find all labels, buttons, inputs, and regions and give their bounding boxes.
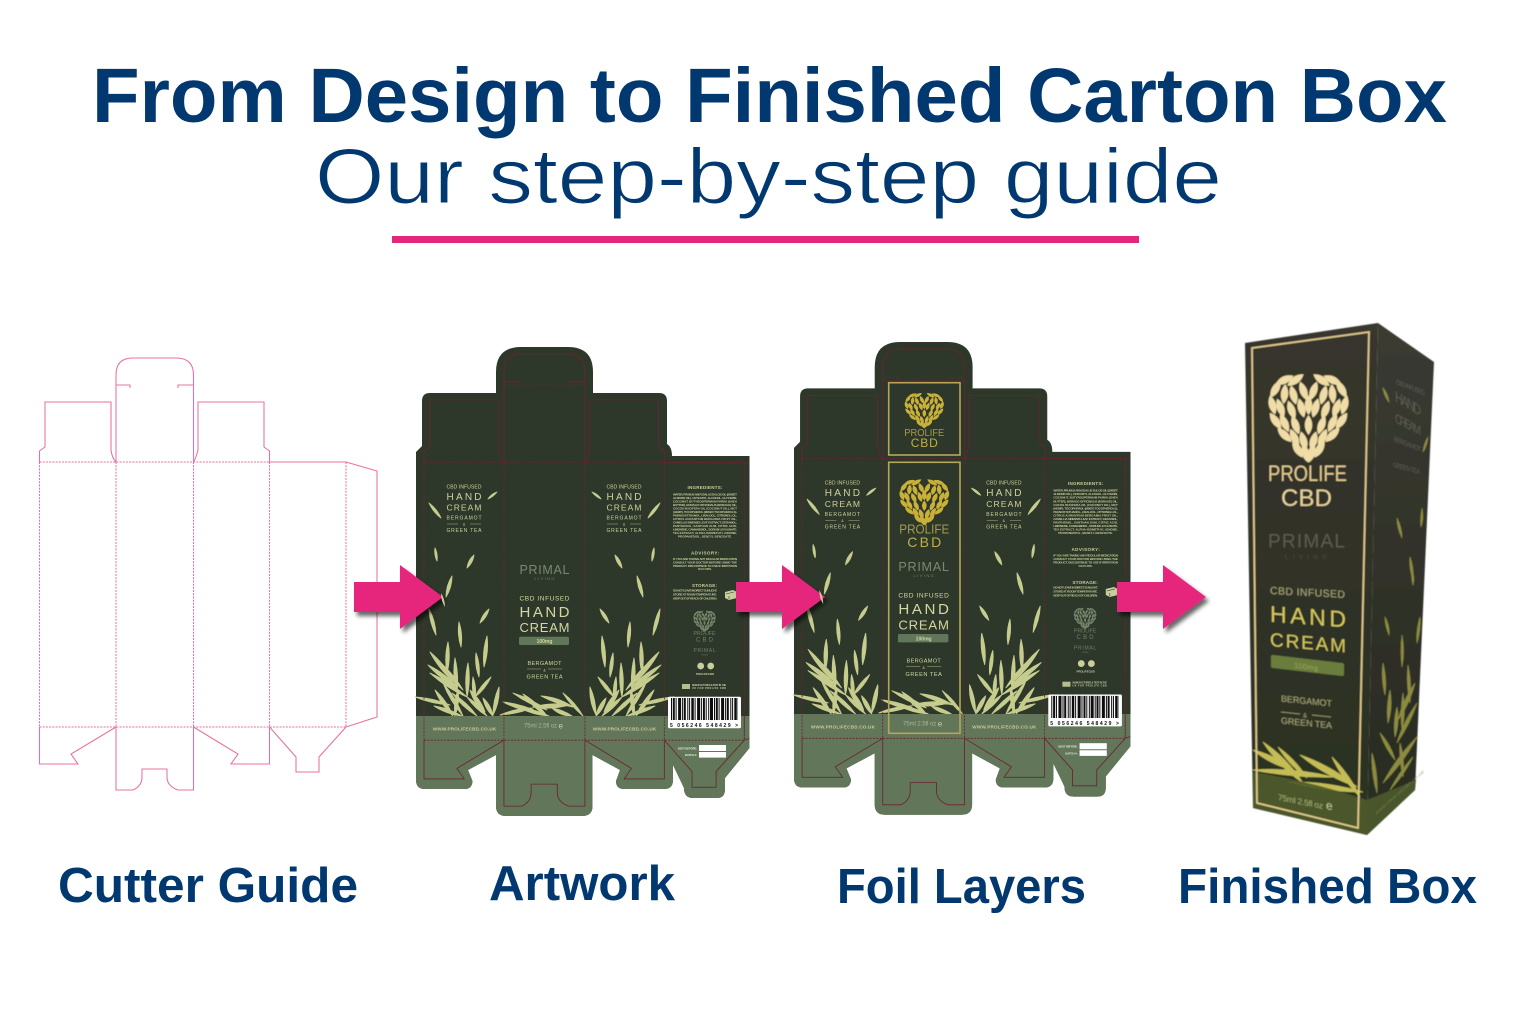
- right panel text: GREEN TEA: [986, 524, 1022, 530]
- back panel text: LIMONENE, CANNABIDIOL, SODIUM LEVULINATE,: [673, 528, 737, 532]
- back panel text: PRIMAL: [1074, 645, 1096, 651]
- arrow 3: [1117, 565, 1206, 629]
- centre panel text: 75ml 2.5fl oz: [903, 722, 936, 728]
- website text: WWW.PROLIFECBD.CO.UK: [972, 725, 1037, 730]
- back panel text: CITRUS AURANTIUM BERGAMIA FRUIT OIL,: [673, 517, 737, 521]
- box product text: CREAM: [1270, 630, 1346, 657]
- back panel text: BEST BEFORE:: [1058, 745, 1078, 749]
- foil logo: top flap: [904, 392, 945, 450]
- label: cutter guide: Cutter Guide: [58, 859, 358, 913]
- back panel text: CITRUS AURANTIUM BERGAMIA FRUIT OIL,: [1053, 513, 1118, 517]
- back panel text: STORE AT ROOM TEMPERATURE.: [1053, 589, 1098, 593]
- box product text: CBD INFUSED: [1270, 585, 1345, 601]
- right panel text: [986, 481, 1022, 530]
- back panel text: TEA EXTRACT, ALPHA-ISOMETHYL IONONE,: [1053, 528, 1118, 532]
- centre panel text: PRIMAL: [898, 560, 949, 574]
- left panel text: BERGAMOT: [446, 516, 482, 522]
- back panel text: KEEP OUT OF REACH OF CHILDREN.: [673, 596, 717, 600]
- box brand text: [1268, 461, 1347, 561]
- back panel text: CBD: [1077, 635, 1094, 641]
- left panel text: [446, 484, 482, 534]
- centre panel text: &: [922, 666, 925, 670]
- box side text: GREEN TEA: [1393, 461, 1421, 477]
- centre panel text: CBD INFUSED: [898, 593, 949, 600]
- back panel text: (HEMP), TOCOPHEROL (MIXED TOCOPHEROLS),: [1053, 506, 1118, 510]
- back panel text: ADVISORY:: [691, 550, 720, 556]
- label: foil layers: Foil Layers: [837, 860, 1086, 914]
- box product text: HAND: [1270, 601, 1346, 632]
- box brand text: LIVING: [1285, 554, 1327, 561]
- back panel text: CONSULT YOUR DOCTOR BEFORE USING THE: [1053, 557, 1118, 561]
- back panel text: PRODUCT. DISCONTINUE TO USE IF IRRITATION: [1053, 561, 1118, 565]
- back panel text: COCOS NUCIFERA OIL (COCONUT OIL), MCT: [673, 506, 737, 510]
- back panel text: PRIMAL: [694, 648, 716, 654]
- back panel text: PROPANEDIOL, BENZYL BENZOATE.: [678, 534, 732, 538]
- back panel text: MANUFACTURED & TEST IN THE: [1072, 682, 1107, 685]
- centre panel text: CREAM: [520, 620, 570, 635]
- website text: [433, 726, 657, 732]
- box brand text: PROLIFE: [1268, 461, 1347, 486]
- box heart logo: [1266, 371, 1351, 464]
- back panel text: STORE AT ROOM TEMPERATURE.: [673, 592, 717, 596]
- back panel text: CAMELLIA SINENSIS LEAF EXTRACT, GERANIOL,: [673, 520, 737, 524]
- back panel logo: [1073, 607, 1097, 629]
- centre panel text: LIVING: [914, 573, 934, 578]
- left panel text: HAND: [446, 492, 482, 503]
- right panel text: &: [623, 522, 626, 526]
- right panel text: BERGAMOT: [606, 516, 642, 522]
- back panel text: [670, 485, 738, 757]
- back panel text: TEA EXTRACT, ALPHA-ISOMETHYL IONONE,: [673, 531, 737, 535]
- right panel text: CBD INFUSED: [606, 484, 642, 490]
- back panel text: STORAGE:: [692, 583, 718, 588]
- back panel text: INGREDIENTS:: [688, 485, 723, 490]
- back panel text: WATER, PRUNUS AMYGDALUS DULCIS OIL (SWEET: [1053, 489, 1118, 493]
- back panel text: WATER, PRUNUS AMYGDALUS DULCIS OIL (SWEET: [673, 492, 737, 496]
- left panel text: &: [463, 522, 466, 526]
- website text: [811, 725, 1037, 730]
- right panel text: &: [1003, 519, 1006, 523]
- back panel text: PHENOXYETHANOL, LINALOOL, CITRONELLOL,: [1053, 510, 1118, 514]
- back panel text: LIVING: [701, 654, 708, 656]
- box product text: &: [1303, 714, 1307, 720]
- leaves on front face: [1253, 742, 1363, 797]
- arrow 1: [354, 565, 443, 629]
- back panel text: BEST BEFORE:: [678, 746, 697, 750]
- right panel text: BERGAMOT: [986, 512, 1022, 518]
- left panel text: &: [841, 519, 844, 523]
- panel: foil layers carton: [793, 342, 1158, 815]
- panel: finished box photo: [1245, 323, 1434, 835]
- website text: WWW.PROLIFECBD.CO.UK: [811, 725, 876, 730]
- box faces: [1245, 323, 1434, 835]
- right panel text: HAND: [986, 488, 1022, 499]
- website text: WWW.PROLIFECBD.CO.UK: [433, 726, 497, 732]
- back panel text: CAMELLIA SINENSIS LEAF EXTRACT, GERANIOL,: [1053, 517, 1118, 521]
- gold frame: [1252, 332, 1369, 828]
- left panel text: GREEN TEA: [446, 528, 482, 534]
- centre panel text: &: [543, 668, 546, 672]
- box side text: [1376, 378, 1425, 816]
- left panel text: CBD INFUSED: [825, 481, 860, 487]
- centre panel text: 100mg: [537, 639, 552, 645]
- back panel text: OCCURS.: [1079, 564, 1093, 568]
- foil frame: top flap: [889, 383, 960, 455]
- title line 2: Our step-by-step guide: [315, 132, 1222, 220]
- green band: [1253, 772, 1416, 835]
- box product text: [1270, 585, 1346, 813]
- centre panel text: HAND: [520, 604, 570, 621]
- centre panel text: BERGAMOT: [907, 659, 941, 665]
- label: artwork: Artwork: [489, 857, 676, 911]
- back panel text: PRODUCT. DISCONTINUE TO USE IF IRRITATION: [673, 564, 737, 568]
- left panel text: CREAM: [446, 502, 482, 512]
- back panel text: INGREDIENTS:: [1068, 481, 1104, 486]
- panel: artwork carton: [415, 347, 777, 816]
- back panel text: BATCH #:: [1065, 751, 1078, 755]
- back panel text: BUTTER), BORAGO OFFICINALIS (BORAGE) OIL,: [673, 503, 737, 507]
- back panel text: BATCH #:: [685, 753, 697, 757]
- label: finished box: Finished Box: [1178, 860, 1477, 914]
- centre panel text: PRIMAL: [520, 563, 570, 577]
- centre panel text: [898, 560, 949, 729]
- right panel text: CREAM: [986, 499, 1022, 509]
- box product text: GREEN TEA: [1281, 716, 1332, 731]
- foil logo: main panel: CBD: [907, 534, 941, 550]
- box product text: 75ml 2.5fl oz: [1278, 792, 1323, 811]
- title: [92, 53, 1447, 220]
- box side text: BERGAMOT: [1394, 435, 1421, 454]
- centre panel text: 75ml 2.5fl oz: [524, 724, 557, 730]
- centre panel text: LIVING: [534, 576, 554, 581]
- right panel text: [606, 484, 642, 534]
- right panel text: HAND: [606, 492, 642, 503]
- website text: WWW.PROLIFECBD.CO.UK: [593, 726, 657, 732]
- box side text: WWW.PROLIFECBD.CO.UK: [1376, 769, 1424, 816]
- right panel text: CBD INFUSED: [986, 481, 1022, 487]
- centre panel text: CBD INFUSED: [520, 596, 570, 602]
- box side text: CREAM: [1395, 410, 1421, 439]
- back panel text: STORAGE:: [1072, 580, 1098, 585]
- centre panel text: e: [558, 722, 564, 730]
- centre panel text: e: [938, 720, 943, 729]
- back panel text: PANTHENOL, XANTHAN GUM, CITRIC ACID,: [673, 524, 737, 528]
- back panel text: PROLIFECBD: [1076, 670, 1095, 674]
- back panel text: COCONUT, BUTYROSPERMUM PARKII (SHEA: [1053, 496, 1119, 500]
- left panel text: BERGAMOT: [825, 512, 860, 518]
- back panel text: COCONUT, BUTYROSPERMUM PARKII (SHEA: [673, 500, 738, 504]
- back panel text: (HEMP), TOCOPHEROL (MIXED TOCOPHEROLS),: [673, 510, 737, 514]
- back panel text: [1050, 481, 1119, 755]
- box product text: e: [1326, 798, 1333, 813]
- back panel text: PROLIFE: [1074, 628, 1096, 634]
- back panel text: PANTHENOL, XANTHAN GUM, CITRIC ACID,: [1053, 520, 1118, 524]
- leaf over arrow 2: [819, 590, 823, 604]
- centre panel text: CREAM: [898, 617, 949, 632]
- back panel text: UK FOR PROLIFE CBD: [1072, 685, 1107, 688]
- centre panel text: BERGAMOT: [528, 661, 562, 667]
- back panel text: LIMONENE, CANNABIDIOL, SODIUM LEVULINATE,: [1053, 524, 1118, 528]
- back panel text: PROLIFE: [694, 631, 716, 637]
- centre panel text: GREEN TEA: [905, 672, 942, 678]
- back panel text: PROLIFECBD: [696, 672, 714, 676]
- left panel text: CBD INFUSED: [446, 484, 482, 490]
- back panel text: OCCURS.: [698, 567, 712, 571]
- box product text: BERGAMOT: [1281, 694, 1332, 709]
- back panel text: PHENOXYETHANOL, LINALOOL, CITRONELLOL,: [673, 514, 737, 518]
- panel: cutter guide dieline: [40, 358, 377, 790]
- arrow 2: [736, 565, 825, 629]
- back panel text: PROPANEDIOL, BENZYL BENZOATE.: [1058, 531, 1113, 535]
- back panel text: IF YOU ARE TAKING ANY REGULAR MEDICATION: [1053, 554, 1118, 558]
- right panel text: CREAM: [606, 502, 642, 512]
- back panel text: COCOS NUCIFERA OIL (COCONUT OIL), MCT: [1053, 503, 1118, 507]
- box product text: 100mg: [1294, 661, 1318, 672]
- leaves on right face: [1372, 388, 1428, 793]
- centre panel text: [520, 563, 570, 730]
- back panel logo: [693, 610, 716, 632]
- left panel text: CREAM: [825, 499, 860, 509]
- foil logo: top flap: CBD: [911, 436, 938, 450]
- back panel text: UK FOR PROLIFE CBD: [692, 687, 726, 690]
- back panel text: 5 056246 548429 >: [1050, 721, 1119, 727]
- back panel text: 5 056246 548429 >: [670, 723, 738, 729]
- pink underline: [392, 236, 1139, 243]
- centre panel text: HAND: [898, 601, 949, 618]
- foil logo: main panel: [898, 478, 950, 550]
- box brand text: PRIMAL: [1268, 532, 1345, 552]
- back panel text: CBD: [696, 638, 714, 644]
- centre panel text: 100mg: [916, 636, 932, 642]
- back panel text: ADVISORY:: [1071, 547, 1100, 552]
- title line 1: From Design to Finished Carton Box: [92, 53, 1447, 139]
- foil logo: main panel: PROLIFE: [899, 522, 949, 536]
- box brand text: CBD: [1281, 485, 1332, 512]
- back panel text: IF YOU ARE TAKING ANY REGULAR MEDICATION: [673, 557, 737, 561]
- back panel text: KEEP OUT OF REACH OF CHILDREN.: [1053, 594, 1098, 598]
- left panel text: GREEN TEA: [825, 524, 861, 530]
- back panel text: DO NOT LEAVE IN DIRECT SUNLIGHT,: [1053, 585, 1098, 589]
- back panel text: ALMOND OIL), CETEARYL ALCOHOL, GLYCERIN,: [1053, 492, 1118, 496]
- back panel text: MANUFACTURED & TEST IN THE: [692, 684, 726, 687]
- leaf over arrow 1: [441, 593, 445, 607]
- left panel text: HAND: [825, 488, 860, 499]
- back panel text: LIVING: [1082, 652, 1089, 654]
- back panel text: CONSULT YOUR DOCTOR BEFORE USING THE: [673, 560, 737, 564]
- box side text: HAND: [1395, 388, 1421, 419]
- right panel text: GREEN TEA: [606, 528, 642, 534]
- foil frame: main panel: [889, 462, 960, 733]
- centre panel text: GREEN TEA: [526, 674, 563, 680]
- foil logo: top flap: PROLIFE: [904, 427, 944, 439]
- box side text: CBD INFUSED: [1396, 378, 1425, 398]
- left panel text: [825, 481, 861, 530]
- back panel text: DO NOT LEAVE IN DIRECT SUNLIGHT,: [673, 588, 717, 592]
- back panel text: ALMOND OIL), CETEARYL ALCOHOL, GLYCERIN,: [673, 496, 737, 500]
- back panel text: BUTTER), BORAGO OFFICINALIS (BORAGE) OIL,: [1053, 499, 1118, 503]
